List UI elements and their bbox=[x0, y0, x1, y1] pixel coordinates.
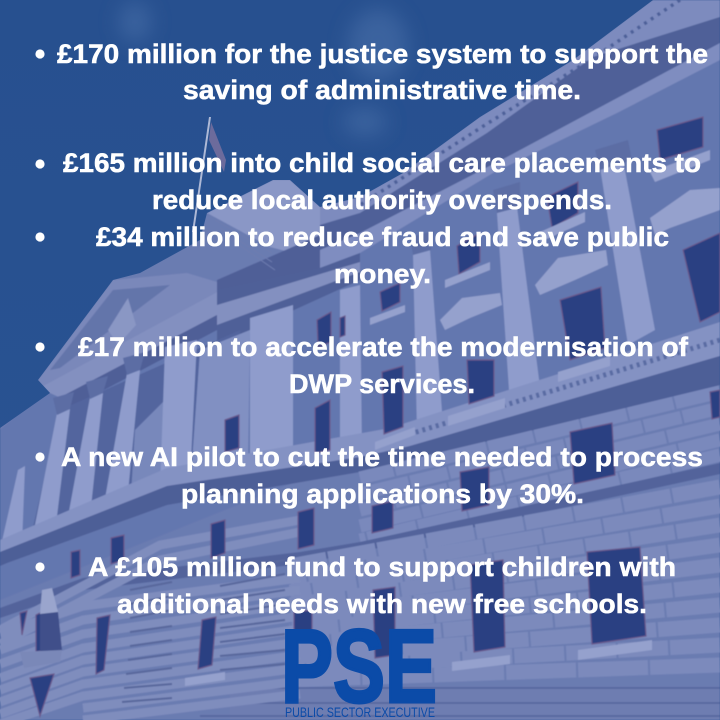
bullet: AI pilot: planning applications by 30%. bbox=[181, 479, 584, 509]
parapet bbox=[320, 0, 720, 225]
bullet list bbox=[35, 39, 708, 619]
light fascia bbox=[320, 43, 720, 268]
bullet: justice system: £170 million for the justice system to support the bbox=[57, 39, 708, 69]
rusticated piers bbox=[122, 560, 285, 702]
bullet: free schools: A £105 million fund to support children with bbox=[88, 552, 676, 582]
bullet: justice system bbox=[35, 39, 708, 105]
stone wall under cornice bbox=[360, 392, 720, 540]
bullet: DWP services: £17 million to accelerate the modernisation of bbox=[78, 332, 689, 362]
plinth bbox=[230, 688, 720, 720]
bullet: fraud bbox=[35, 222, 669, 289]
central tower bbox=[208, 180, 320, 251]
bullet: child social care: £165 million into child social care placements to bbox=[63, 148, 701, 178]
recesses behind columns bbox=[34, 340, 217, 525]
window sills and pediments bbox=[185, 150, 720, 686]
lower stone courses right bbox=[290, 487, 720, 680]
bullet: DWP services bbox=[35, 332, 689, 399]
bullet: child social care bbox=[35, 148, 701, 215]
bullet: AI pilot: A new AI pilot to cut the time needed to process bbox=[61, 442, 703, 472]
bullet: DWP services: DWP services. bbox=[289, 369, 475, 399]
columns bbox=[0, 160, 655, 550]
main cornice with balustrades bbox=[0, 322, 720, 560]
upper wall shading bbox=[0, 60, 720, 600]
bullet: free schools bbox=[35, 552, 676, 619]
bullet: free schools: additional needs with new free schools. bbox=[117, 589, 647, 619]
bullet: child social care: reduce local authority overspends. bbox=[152, 185, 612, 215]
union flag on flagpole bbox=[192, 117, 226, 232]
statue niche bbox=[40, 612, 62, 655]
bullet: justice system: saving of administrative time. bbox=[183, 75, 581, 105]
lower stone courses left bbox=[0, 520, 300, 720]
bullet: fraud: money. bbox=[334, 259, 431, 289]
dark dentil band bbox=[320, 17, 720, 250]
bullet: fraud: £34 million to reduce fraud and save public bbox=[96, 222, 669, 252]
logo: PSE Public Sector Executive: PUBLIC SECTOR EXECUTIVE bbox=[285, 704, 435, 720]
string course bbox=[0, 463, 720, 618]
column capitals bbox=[53, 140, 632, 415]
pediment bbox=[38, 273, 217, 386]
bullet: AI pilot bbox=[35, 442, 703, 509]
